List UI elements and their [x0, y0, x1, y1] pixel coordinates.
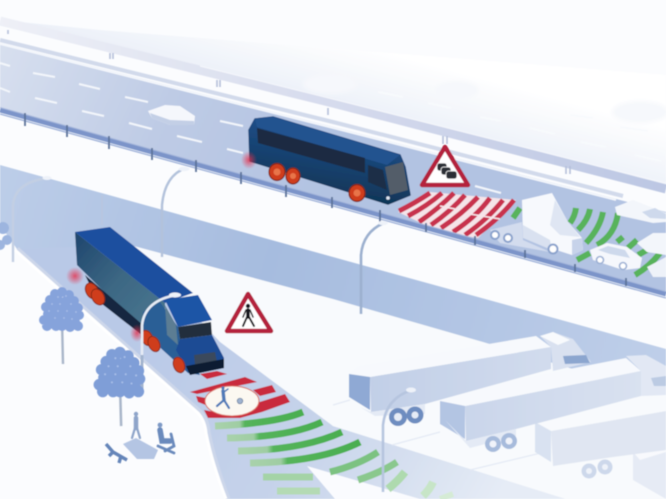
truck cab side — [143, 302, 200, 375]
main highway — [0, 40, 666, 292]
lamp far left — [13, 178, 48, 262]
bus door window — [368, 165, 387, 190]
green safe-zone arcs on highway around tractor — [513, 208, 660, 275]
highway lane dashes — [0, 63, 501, 193]
lamp by truck — [142, 295, 177, 355]
far highway lane dashes — [378, 92, 661, 161]
green safe-zone arcs on ramp — [215, 412, 453, 499]
lower ground island near parking — [307, 466, 420, 499]
truck cab roof — [165, 295, 212, 327]
parked truck 1 cab — [540, 332, 591, 371]
truck hood and front — [176, 335, 224, 375]
far highway — [0, 20, 666, 188]
bus roof — [255, 117, 400, 165]
curb: ramp left edge — [15, 249, 228, 499]
warning sign: pedestrian — [227, 294, 271, 331]
truck windscreen — [178, 322, 212, 339]
lamp faint post — [101, 195, 103, 225]
park rock with people and benches — [106, 412, 174, 463]
parked truck 2 — [440, 355, 666, 452]
ramp road towards parking — [17, 245, 566, 499]
white tractor unit ahead of bus — [490, 193, 583, 255]
left bench — [106, 444, 127, 463]
highway shoulder strip and edge line — [0, 40, 623, 196]
far guard rail — [0, 21, 666, 189]
bus body — [249, 117, 410, 204]
parked truck 2 cab — [626, 355, 666, 396]
lower service road — [0, 165, 666, 412]
parking bay lines — [333, 400, 545, 470]
traffic icon: three cars — [437, 163, 457, 179]
bus windscreen — [385, 162, 408, 195]
red warning stripes on highway ahead of bus — [398, 192, 516, 238]
truck chassis — [85, 275, 143, 336]
white car on highway — [148, 105, 195, 125]
bus headlight — [386, 196, 390, 200]
pedestrian icon — [243, 304, 254, 326]
tree two — [99, 352, 140, 426]
lamp mid-highway — [361, 223, 384, 314]
truck grille — [194, 352, 217, 365]
bus wheels — [269, 164, 365, 202]
lamp by parking — [383, 390, 412, 492]
parked truck 1 trailer — [370, 347, 551, 412]
tree left edge — [0, 222, 12, 250]
rock — [123, 438, 158, 459]
street lamps — [13, 168, 412, 492]
parked truck 2 trailer — [465, 371, 641, 441]
truck sensor glows — [66, 267, 84, 285]
football — [237, 398, 243, 404]
lamp heads — [42, 167, 416, 392]
tree one — [44, 292, 79, 364]
main guard rail — [0, 108, 666, 298]
bus rear sensor glow — [241, 151, 257, 169]
white traffic cars ahead — [590, 200, 666, 277]
parked trailer 4 — [633, 442, 666, 499]
semi truck with trailer — [66, 227, 224, 375]
truck trailer top — [75, 227, 193, 303]
lamp mid-left — [162, 168, 186, 257]
sitting person and bench — [158, 423, 174, 453]
bus side window band — [257, 128, 365, 173]
truck wheels — [83, 281, 187, 374]
white island between road and ramp — [130, 245, 666, 499]
parked trailer 3 — [535, 392, 666, 478]
warning sign: traffic jam — [422, 147, 468, 185]
truck trailer side — [75, 232, 165, 342]
red warning arcs on ramp — [190, 371, 290, 418]
standing person — [132, 412, 140, 438]
bus — [241, 117, 410, 204]
far highway blurred cars — [303, 74, 666, 123]
pedestrian highlight circle — [205, 386, 259, 416]
parked truck 1 — [349, 332, 591, 426]
child running figure — [217, 386, 229, 408]
